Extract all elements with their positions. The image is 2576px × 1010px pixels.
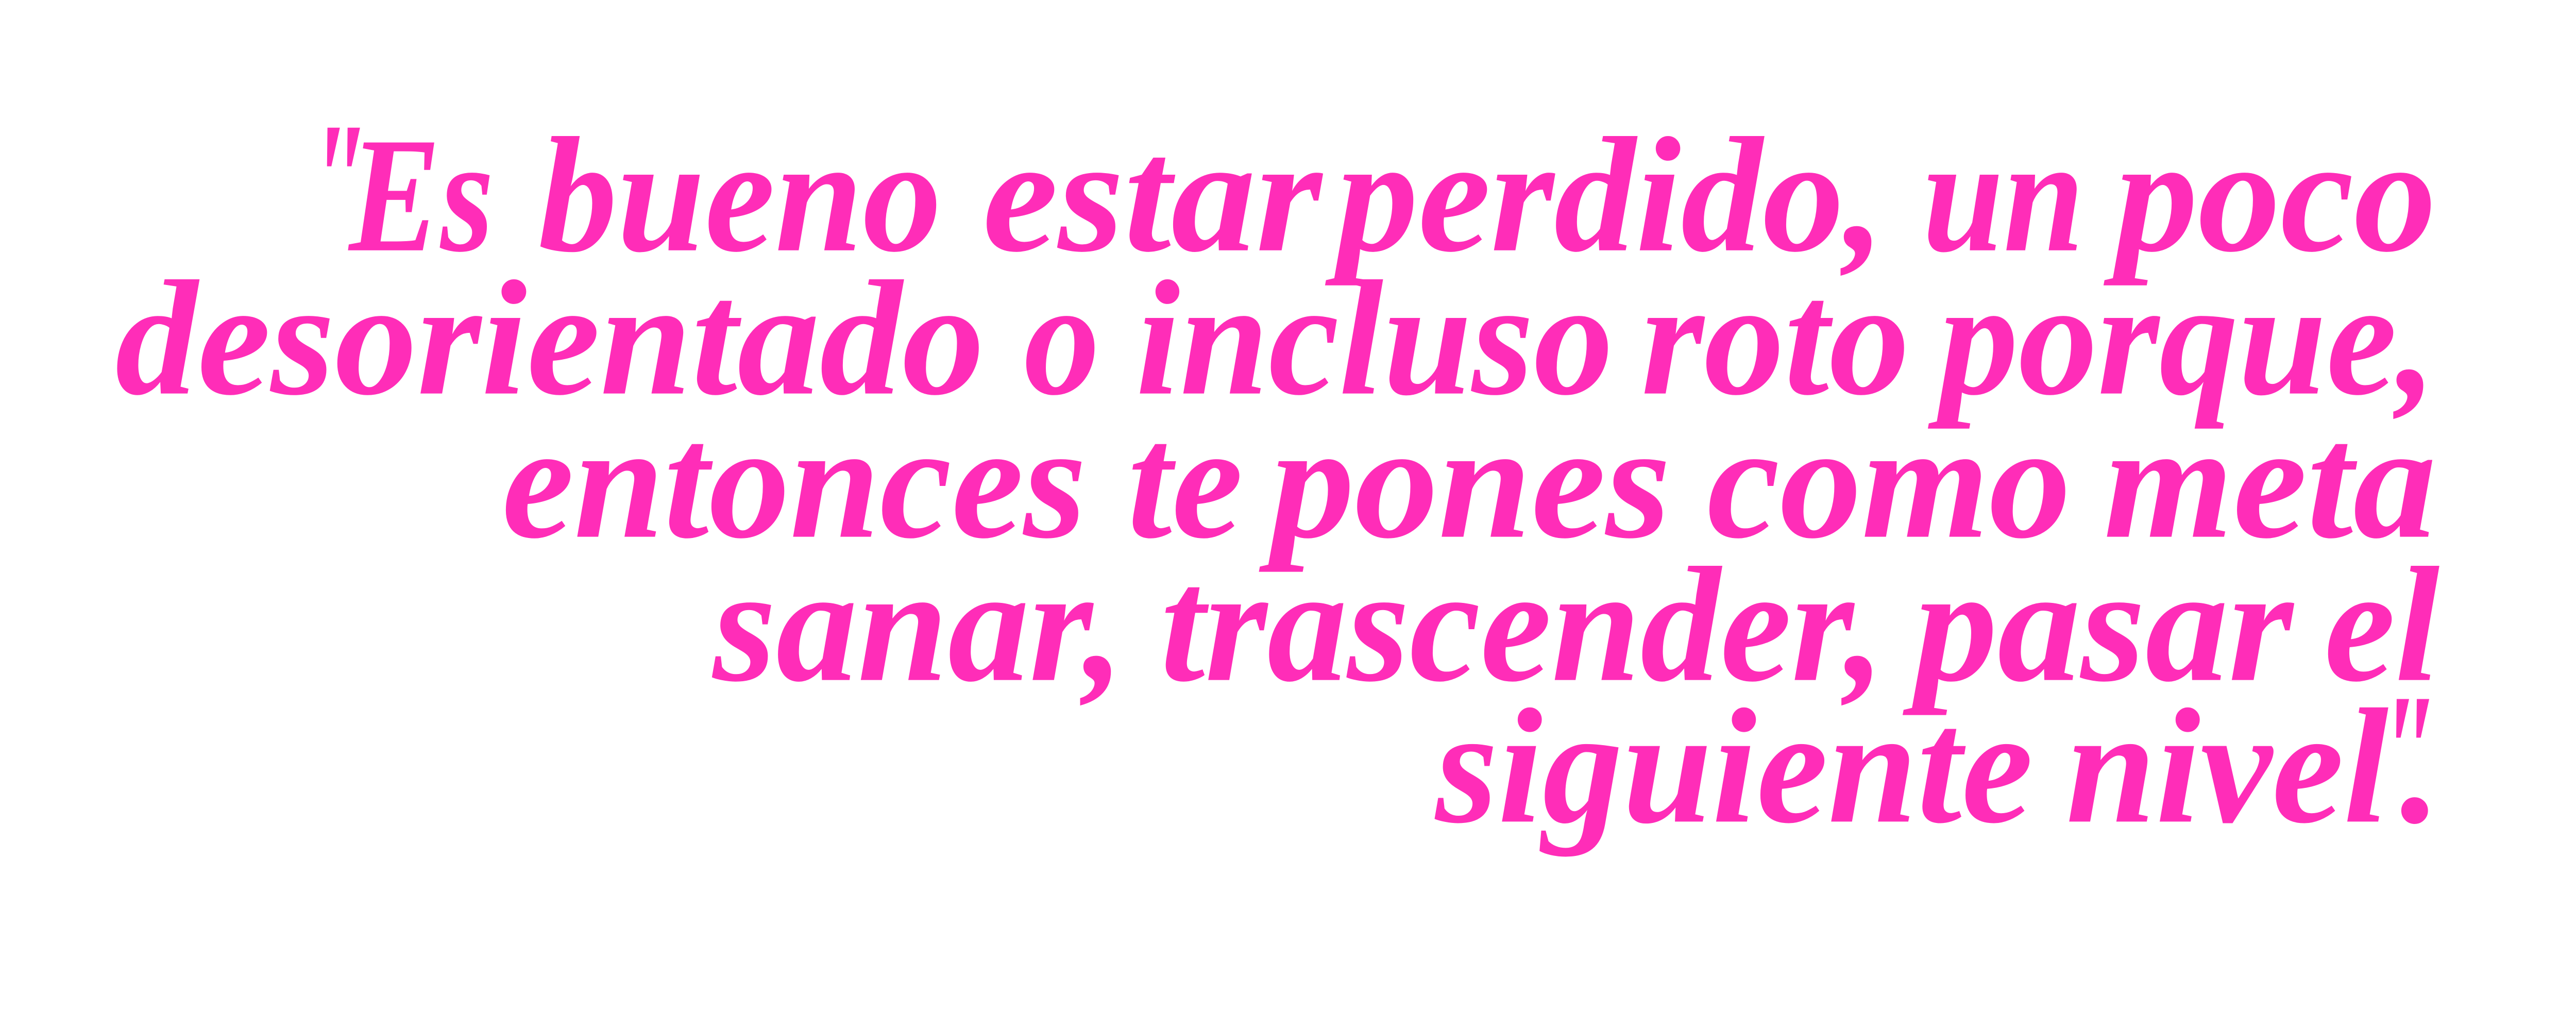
quote line 5: nivel xyxy=(2066,675,2389,857)
quote line 2: incluso xyxy=(1136,247,1613,430)
quote line 2 xyxy=(115,247,2436,430)
quote line 3: como xyxy=(1707,391,2071,573)
quote line 2: o xyxy=(1024,247,1099,430)
quote line 5: " xyxy=(2377,661,2436,843)
quote line 1: " xyxy=(308,89,367,272)
quote line 1: un xyxy=(1923,104,2084,287)
quote line 1: estar xyxy=(983,104,1325,287)
quote line 5: . xyxy=(2400,675,2441,857)
quote line 1 xyxy=(308,89,2436,287)
quote line 5: siguiente xyxy=(1433,675,2033,857)
quote line 3: te xyxy=(1128,391,1243,573)
quote line 4: trascender, xyxy=(1161,534,1885,716)
quote line 4: sanar, xyxy=(710,534,1124,716)
quote line 1: poco xyxy=(2103,104,2436,287)
quote line 2: roto xyxy=(1641,247,1909,430)
quote line 5 xyxy=(1433,661,2441,857)
quote line 3 xyxy=(502,391,2436,573)
quote line 2: desorientado xyxy=(115,247,985,430)
quote line 3: entonces xyxy=(502,391,1087,573)
quote line 4 xyxy=(710,534,2440,716)
quote line 1: bueno xyxy=(538,104,942,287)
quote line 4: el xyxy=(2325,534,2440,716)
quote line 3: meta xyxy=(2104,391,2436,573)
quote line 2: porque, xyxy=(1927,247,2436,430)
quote line 1: Es xyxy=(347,104,494,287)
quote line 1: perdido, xyxy=(1324,104,1885,287)
quote line 3: pones xyxy=(1258,391,1671,573)
quote line 4: pasar xyxy=(1902,534,2296,716)
